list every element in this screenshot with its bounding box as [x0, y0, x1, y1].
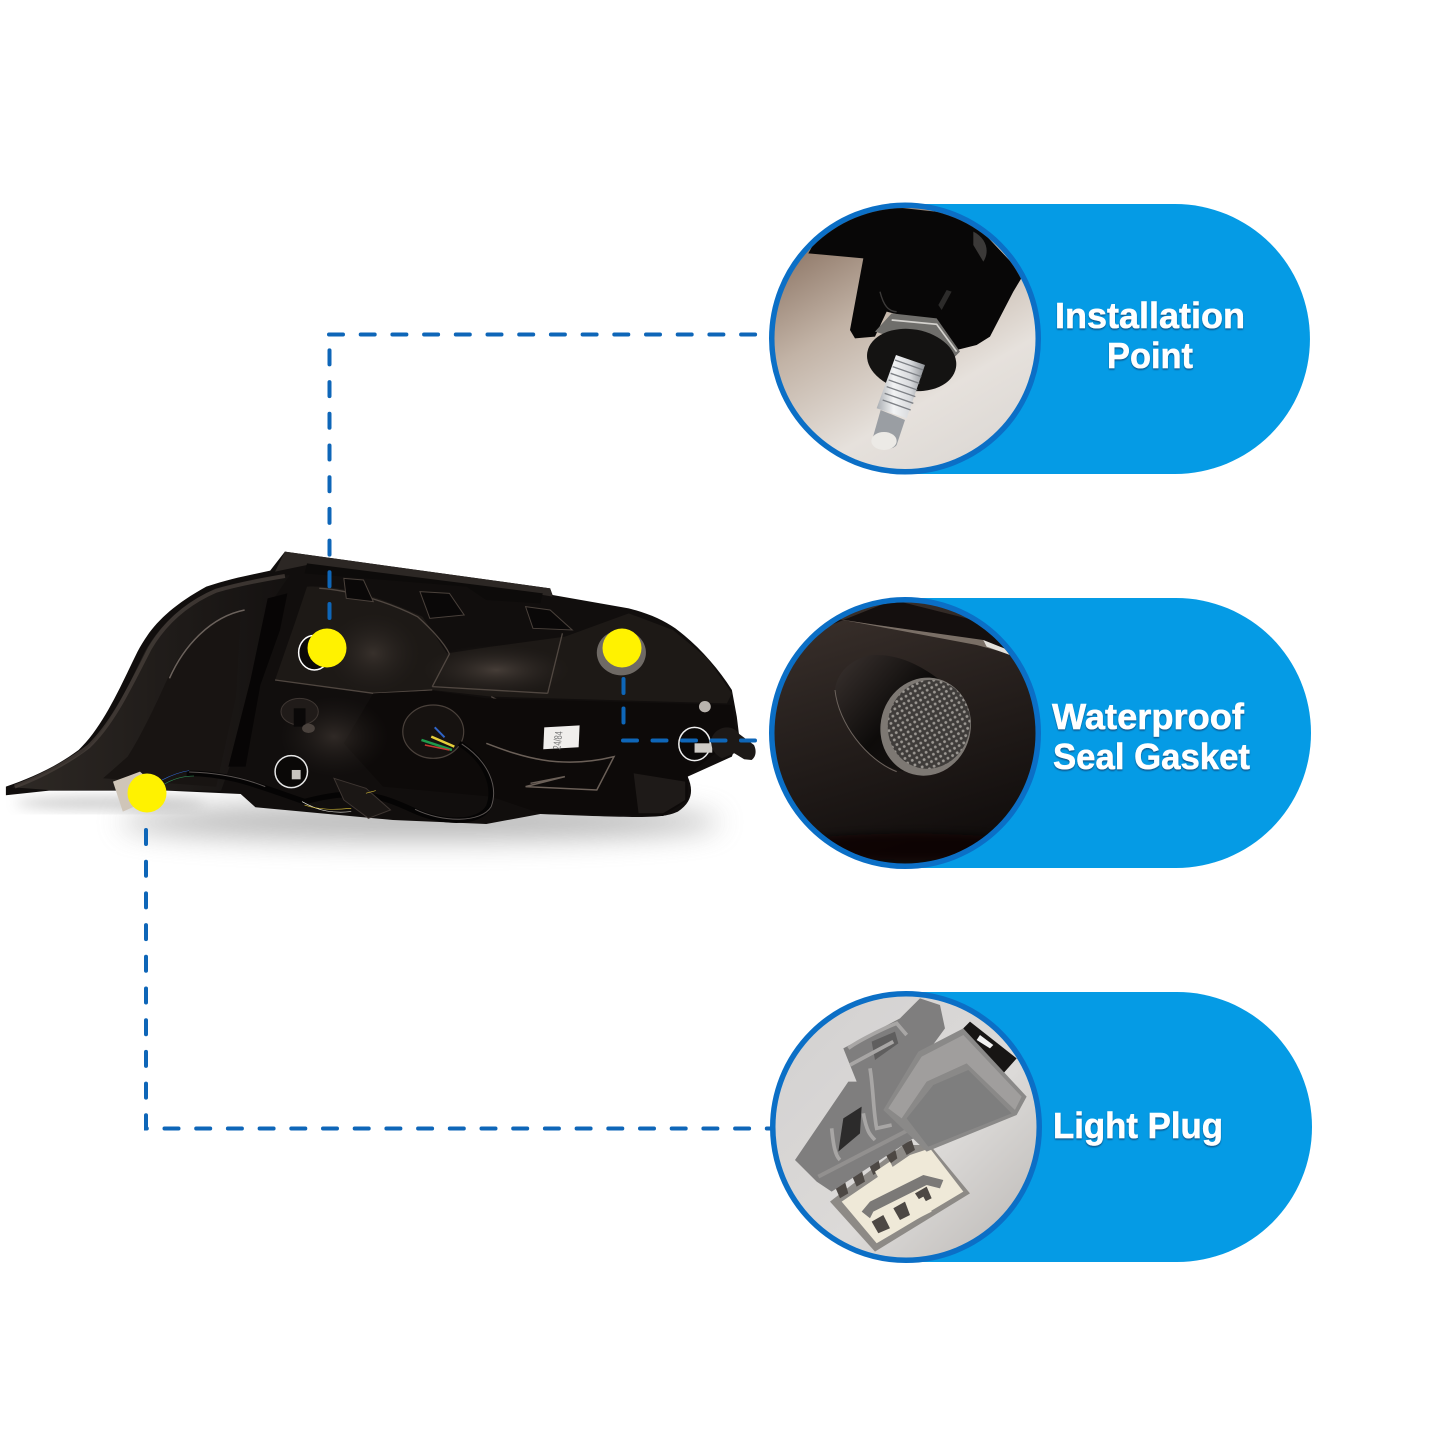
top right bolt: [699, 701, 711, 712]
small wires: [162, 771, 376, 812]
marker dot: waterproof gasket: [602, 628, 642, 668]
pill background: [905, 598, 1311, 868]
pill background: [906, 992, 1312, 1262]
breather nozzle: [711, 727, 756, 760]
foam washer: [867, 328, 956, 392]
cover frame: [888, 1035, 1022, 1118]
panel: waterproof seal gasket: [770, 598, 1311, 870]
headlight shadow: [15, 796, 720, 840]
rim shadow: [305, 563, 543, 603]
side slots: [838, 1107, 862, 1152]
cover face: [907, 1070, 1012, 1147]
front shelf highlight: [818, 1130, 908, 1177]
panel: light plug: [770, 992, 1312, 1262]
rubber boot: [334, 778, 391, 818]
circle ring: [772, 206, 1038, 472]
dashed connector: light plug: [146, 830, 772, 1128]
lower chin: [634, 773, 685, 813]
lower recess highlight: [486, 743, 614, 790]
gasket tube: [847, 656, 938, 772]
wing recessed panel: [103, 610, 241, 787]
circle ring: [772, 600, 1038, 866]
label: Seal Gasket: [1053, 736, 1250, 777]
marker dot: installation point: [308, 628, 346, 668]
label sticker: [543, 725, 580, 750]
wing edge highlight: [15, 576, 285, 787]
bolt tip: [872, 410, 905, 449]
upper housing: [275, 587, 732, 703]
wire loop highlight: [189, 744, 494, 819]
panel: installation point: [770, 204, 1310, 475]
headlight body: [6, 552, 756, 824]
label: Light Plug: [1053, 1105, 1223, 1146]
central left sheen: [280, 697, 388, 777]
lower housing: [344, 691, 737, 816]
gasket rim: [880, 678, 971, 776]
marker dot: light plug: [128, 774, 166, 812]
dashed connector: installation point: [329, 334, 760, 618]
label: [1052, 696, 1250, 777]
deep slot: [228, 593, 287, 767]
mounting tabs: [344, 578, 572, 630]
lower left stud: [275, 756, 307, 788]
rubber grommet: [281, 698, 318, 733]
rear wires: [962, 1022, 1017, 1072]
gasket mesh: [888, 680, 970, 769]
label: Installation: [1055, 295, 1245, 336]
lower right stud: [679, 727, 712, 761]
threaded bolt: [877, 355, 925, 418]
left bulge light: [327, 613, 420, 693]
headlight assembly: [6, 552, 756, 840]
ivory tab squares: [918, 1196, 932, 1218]
main wire loop: [187, 743, 491, 820]
photo: mounting stud: [770, 205, 1040, 475]
plug body side: [795, 998, 945, 1192]
housing contour highlights: [275, 588, 634, 763]
photo: gasket: [770, 600, 1040, 870]
pill background: [905, 204, 1310, 474]
panel edge highlight: [169, 610, 245, 678]
photo: connector plug: [770, 992, 1040, 1262]
reflective bulge: [422, 645, 570, 695]
terminal notches: [835, 1140, 932, 1233]
inner gray divider: [862, 1175, 943, 1218]
terminal window: [875, 1162, 892, 1177]
label: Point: [1107, 335, 1193, 376]
label sticker: 24/84: [551, 731, 565, 750]
gray base rim: [830, 1145, 970, 1252]
ivory terminal block: [842, 1148, 963, 1243]
right gasket: [597, 630, 646, 675]
hex nut: [875, 313, 960, 358]
clip ridges: [832, 1023, 907, 1160]
plug top cover: [883, 1028, 1027, 1152]
top rim: [275, 552, 553, 597]
outer wing panel: [12, 575, 290, 791]
label: [1055, 295, 1245, 376]
circle ring: [773, 994, 1039, 1260]
central wire socket: [403, 705, 464, 758]
dashed connector: waterproof seal gasket: [623, 679, 760, 740]
beige plug: [113, 772, 165, 812]
label: Waterproof: [1052, 696, 1245, 737]
left bulb socket: [299, 635, 330, 670]
